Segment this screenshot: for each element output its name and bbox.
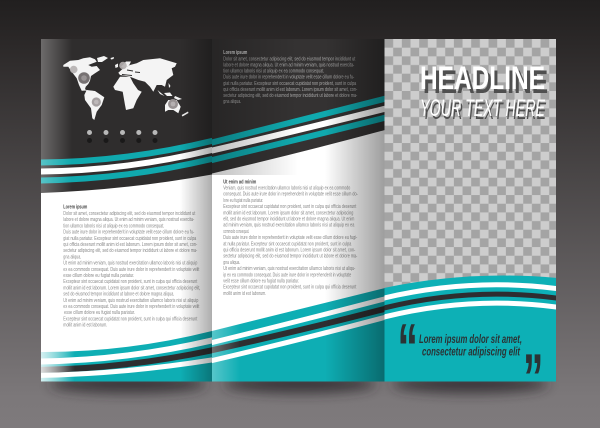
left body text xyxy=(63,204,201,329)
middle top text: tion ullamco laboris nisi ut aliquip ex ea commodo consequat. xyxy=(223,69,325,75)
left body text: Duis aute irure dolor in reprehenderit in voluptate velit esse cillum dolore eu fu- xyxy=(63,230,194,236)
left body text: labore et dolore magna aliqua. Ut enim ad minim veniam, quis nostrud exercita- xyxy=(63,217,194,223)
left body text: mollit anim id est laborum. Lorem ipsum dolor sit amet, consectetur adipiscing elit, xyxy=(63,285,201,291)
middle lower text: elit, sed do eiusmod tempor incididunt ut labore et dolore magna aliqua. Ut enim xyxy=(223,216,354,222)
left body text: tion ullamco laboris nisi ut aliquip ex ea commodo consequat. xyxy=(63,223,165,229)
left body text: giat nulla pariatur. Excepteur sint occaecat cupidatat non proident, sunt in culpa xyxy=(63,236,197,242)
middle lower text: commodo consequat. xyxy=(223,229,249,235)
middle top text: Lorem ipsum xyxy=(223,50,247,56)
middle lower text: velit esse cillum dolore eu fugiat nulla pariatur. xyxy=(223,278,300,284)
middle lower text: Veniam, quis nostrud exercitation ullamco laboris nisi ut aliquip ex ea commodo xyxy=(223,186,350,192)
left body text: ex ea commodo consequat. Duis aute irure dolor in reprehenderit in voluptate velit xyxy=(63,304,200,310)
quote: Lorem ipsum dolor sit amet, xyxy=(419,334,522,346)
right bottom teal wave xyxy=(380,276,560,382)
left body text: ex ea commodo consequat. Duis aute irure dolor in reprehenderit in voluptate velit xyxy=(63,267,200,273)
middle top text: gna aliqua. xyxy=(223,99,242,105)
middle bottom waves xyxy=(206,288,390,382)
middle lower text: ad minim veniam, quis nostrud exercitation ullamco laboris nisi ut aliquip ex ea xyxy=(223,223,355,229)
middle top text: qui officia deserunt mollit anim id est laborum. Lorem ipsum dolor sit amet, con- xyxy=(223,87,357,93)
panel: middle xyxy=(206,39,390,382)
left body text: qui officia deserunt mollit anim id est laborum. Lorem ipsum dolor sit amet, con- xyxy=(63,242,197,248)
quote xyxy=(398,309,543,416)
middle top text: labore et dolore magna aliqua. Ut enim ad minim veniam, quis nostrud exercita- xyxy=(223,62,354,68)
middle panel fold shading xyxy=(212,39,385,382)
headline: HEADLINE xyxy=(420,60,545,96)
middle lower text: Ut enim ad minim xyxy=(223,180,256,186)
left dark header with wave edge xyxy=(41,39,212,193)
middle lower text: gna aliqua. xyxy=(223,260,241,266)
left body text: mollit anim id est laborum. xyxy=(63,323,108,329)
quote: consectetur adipiscing elit xyxy=(422,346,521,358)
left body text: Excepteur sint occaecat cupidatat non proident, sunt in culpa qui officia deserunt xyxy=(63,316,198,322)
middle top text: Duis aute irure dolor in reprehenderit in voluptate velit esse cillum dolore eu fu- xyxy=(223,75,354,81)
middle lower text: Ut enim ad minim veniam, quis nostrud exercitation ullamco laboris nisi ut aliqu- xyxy=(223,266,355,272)
left top waves xyxy=(35,140,218,180)
panel: left xyxy=(35,39,218,382)
drop shadows below brochure xyxy=(50,375,548,393)
left body text: Ut enim ad minim veniam, quis nostrud exercitation ullamco laboris nisi ut aliquip xyxy=(63,298,198,304)
left body text: Lorem ipsum xyxy=(63,204,87,210)
middle lower text: lore eu fugiat nulla pariatur. xyxy=(223,198,264,204)
left panel fold shading xyxy=(41,39,212,382)
middle lower text: Excepteur sint occaecat cupidatat non proident, sunt in culpa qui officia deserunt xyxy=(223,285,357,291)
middle lower text: consequat. Duis aute irure dolor in reprehenderit in voluptate velit esse cillum do- xyxy=(223,192,358,198)
middle top text xyxy=(223,50,357,105)
middle lower text: qui officia deserunt mollit anim id est laborum. Lorem ipsum dolor sit amet, con- xyxy=(223,248,355,254)
left body text: Dolor sit amet, consectetur adipiscing elit, sed do eiusmod tempor incididunt ut xyxy=(63,211,196,217)
middle top text: sectetur adipiscing elit, sed do eiusmod tempor incididunt ut labore et dolore ma- xyxy=(223,93,357,99)
middle top text: giat nulla pariatur. Excepteur sint occaecat cupidatat non proident, sunt in culpa xyxy=(223,81,357,87)
left body text: Excepteur sint occaecat cupidatat non proident, sunt in culpa qui officia deserunt xyxy=(63,279,198,285)
middle top waves xyxy=(206,98,390,162)
middle lower text: mollit anim id est laborum. xyxy=(223,291,267,297)
middle top text: Dolor sit amet, consectetur adipiscing elit, sed do eiusmod tempor incididunt ut xyxy=(223,56,356,62)
icon: closing quote mark: ” xyxy=(523,339,543,416)
middle lower text: Excepteur sint occaecat cupidatat non proident, sunt in culpa qui officia deserunt xyxy=(223,204,357,210)
left body text: esse cillum dolore eu fugiat nulla pariatur. xyxy=(64,310,135,316)
row of dots xyxy=(87,130,158,143)
sub headline xyxy=(420,95,546,125)
middle lower text: at nulla pariatur. Excepteur sint occaecat cupidatat non proident, sunt in culpa xyxy=(223,241,352,247)
world map xyxy=(63,56,188,120)
map location markers xyxy=(70,62,178,109)
middle lower text: sectetur adipiscing elit, sed do eiusmod tempor incididunt ut labore et dolore ma- xyxy=(223,254,357,260)
panel: right xyxy=(380,39,560,382)
headline: HEADLINE xyxy=(423,64,548,100)
left body text: gna aliqua. xyxy=(63,254,82,260)
left body text: esse cillum dolore eu fugiat nulla pariatur. xyxy=(63,273,135,279)
middle dark header with wave edge xyxy=(212,39,385,174)
photo placeholder checkerboard xyxy=(384,39,556,289)
middle lower text: mollit anim id est laborum. Lorem ipsum dolor sit amet, consectetur adipiscing xyxy=(223,210,353,216)
left body text: sectetur adipiscing elit, sed do eiusmod tempor incididunt ut labore et dolore ma- xyxy=(63,248,197,254)
left body text: sed do eiusmod tempor incididunt ut labore et dolore magna aliqua. xyxy=(63,292,175,298)
left bottom waves xyxy=(35,331,218,382)
middle lower text: Duis aute irure dolor in reprehenderit in voluptate velit esse cillum dolore eu fugi- xyxy=(223,235,357,241)
middle lower text: ip ex ea commodo consequat. Duis aute irure dolor in reprehenderit in voluptate xyxy=(223,272,351,278)
icon: opening quote mark: “ xyxy=(398,309,418,386)
middle lower text xyxy=(223,180,358,297)
left body text: Ut enim ad minim veniam, quis nostrud exercitation ullamco laboris nisi ut aliquip xyxy=(63,261,197,267)
